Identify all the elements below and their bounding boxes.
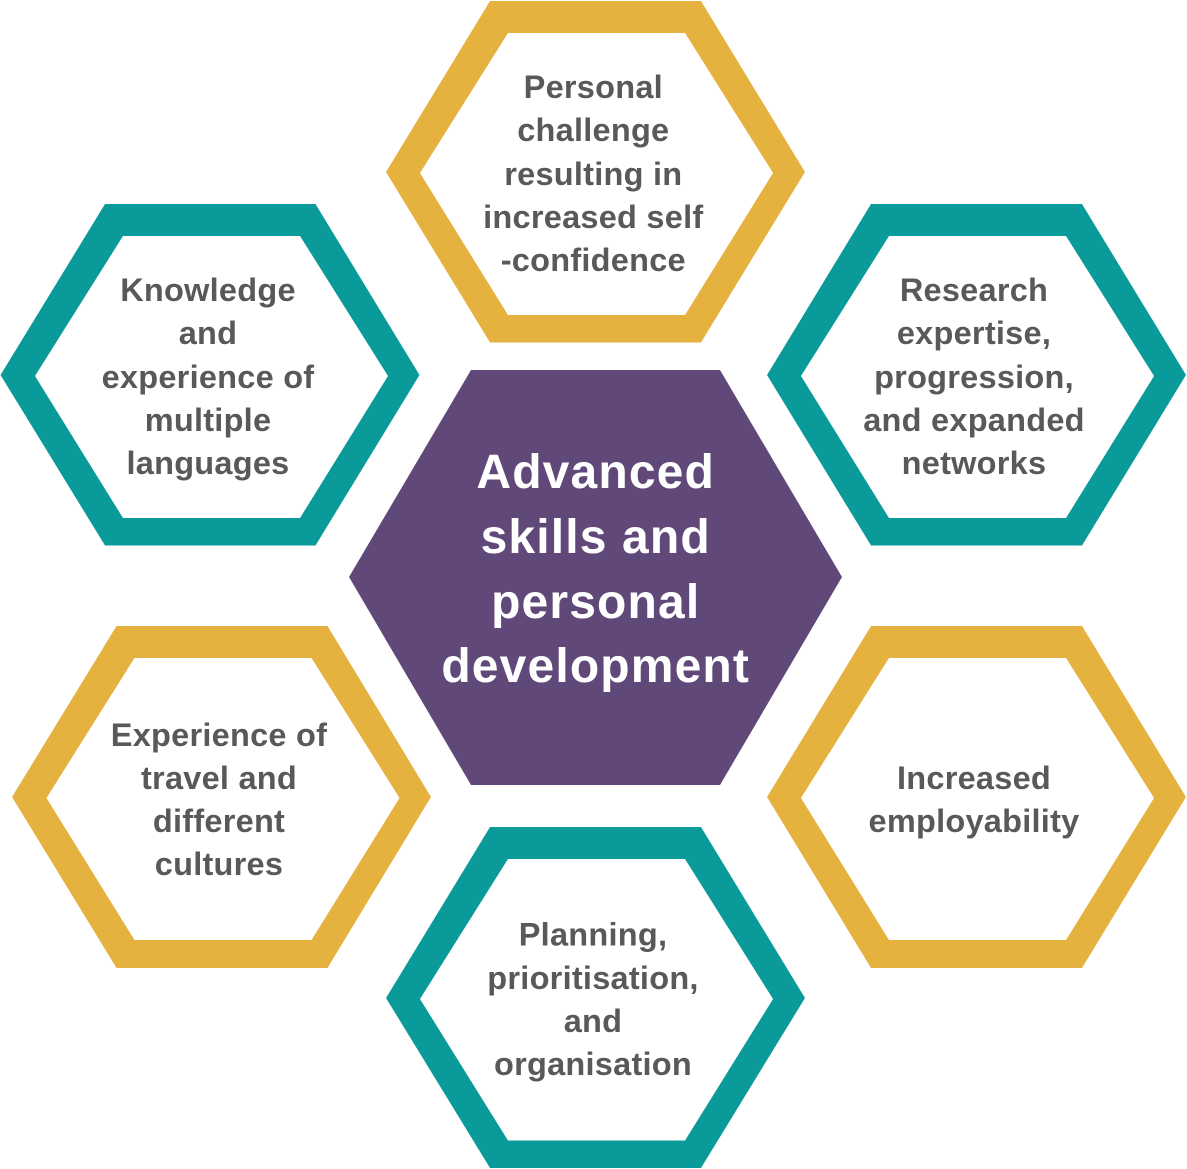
hexagon: Planning: and — [564, 1003, 622, 1039]
hexagon: Research expertise: and expanded — [863, 402, 1085, 438]
hexagon: Personal challenge: Personal — [524, 69, 663, 105]
hexagon: Experience of travel: different — [153, 803, 285, 839]
hexagon: Planning: organisation — [494, 1046, 692, 1082]
hexagon: central purple: personal — [491, 576, 700, 629]
hexagon: Research expertise — [767, 204, 1186, 546]
hexagon: Experience of travel: Experience of — [111, 717, 327, 753]
hexagon: Personal challenge: resulting in — [504, 156, 682, 192]
hexagon: central purple: development — [441, 640, 750, 693]
hexagon: Personal challenge: -confidence — [501, 242, 686, 278]
hexagon: Planning: prioritisation, — [487, 960, 699, 996]
hexagon: Personal challenge — [386, 1, 805, 342]
hexagon: Increased employability — [767, 626, 1186, 968]
hexagon: Research expertise: progression, — [874, 359, 1074, 395]
hexagon: Planning: Planning, — [519, 916, 667, 952]
hexagon: Knowledge and languages: and — [179, 315, 237, 351]
hexagon: Experience of travel: travel and — [141, 760, 297, 796]
hexagon: Research expertise: expertise, — [897, 315, 1051, 351]
hexagon: Knowledge and languages: Knowledge — [120, 272, 296, 308]
hexagon: Increased employability: employability — [869, 803, 1079, 839]
hexagon: Knowledge and languages: multiple — [145, 402, 271, 438]
hexagon: Knowledge and languages — [0, 204, 420, 546]
hexagon: Experience of travel: cultures — [155, 846, 283, 882]
hexagon: Increased employability: Increased — [897, 760, 1051, 796]
hexagon: Personal challenge: increased self — [483, 199, 703, 235]
hexagon: Experience of travel — [12, 626, 431, 968]
hexagon: Research expertise: networks — [902, 445, 1046, 481]
hexagon: central purple — [349, 370, 842, 785]
hexagon: central purple: Advanced — [476, 446, 715, 499]
hexagon: Knowledge and languages: experience of — [102, 359, 314, 395]
hexagon: Planning — [386, 827, 805, 1168]
hexagon: Research expertise: Research — [900, 272, 1048, 308]
hexagon: Knowledge and languages: languages — [126, 445, 290, 481]
hexagon: Personal challenge: challenge — [517, 112, 669, 148]
hexagon: central purple: skills and — [481, 511, 711, 564]
